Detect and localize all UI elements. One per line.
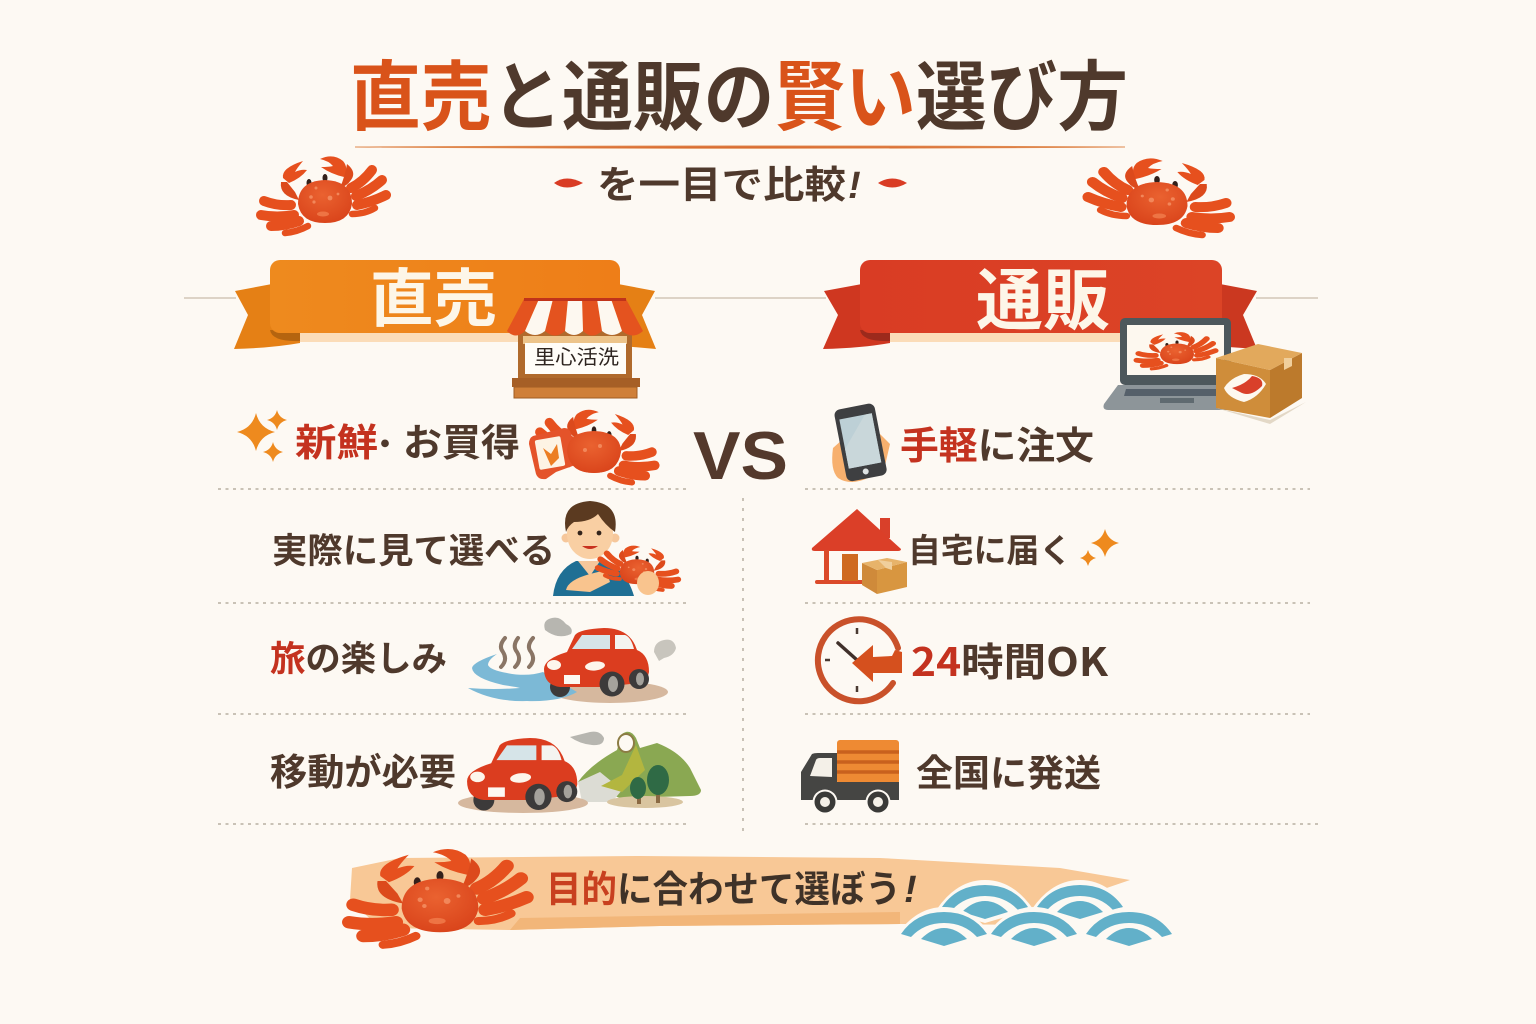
- icon: person with crab: [553, 501, 678, 596]
- icon: crab and card: [529, 410, 655, 482]
- icon: shop: 里心活洗: [534, 341, 619, 370]
- banner: 通販: [823, 247, 1257, 349]
- row: 全国に発送: 全国に発送: [916, 743, 1101, 797]
- row: 全国に発送: [801, 740, 1101, 814]
- row: 自宅に届く: 自宅に届く: [908, 524, 1072, 572]
- row: 24時間OK: 24時間OK: [911, 632, 1108, 688]
- row: 手軽に注文: 手軽に注文: [900, 415, 1094, 470]
- banner: 直売: 直売: [370, 249, 497, 340]
- row: 実際に見て選べる: 実際に見て選べる: [272, 523, 555, 574]
- row: 新鮮・お買得: [237, 410, 520, 467]
- row: 24時間OK: [818, 619, 1108, 701]
- row: 手軽に注文: [832, 403, 1094, 482]
- title: 直売と通販の賢い選び方: [350, 36, 1128, 146]
- icon: clock with arrow: [818, 619, 902, 701]
- crab: top left: [261, 156, 386, 233]
- row: 旅の楽しみ: 旅の楽しみ: [270, 631, 447, 682]
- waves: [896, 880, 1177, 950]
- center dotted divider: [742, 498, 744, 836]
- icon: truck: [801, 740, 899, 814]
- icon: house and box: [812, 509, 907, 594]
- subtitle: !: [848, 165, 861, 207]
- row: 新鮮・お買得: お買得: [403, 412, 520, 467]
- title underline: [355, 146, 1125, 148]
- icon: shop: [507, 298, 643, 398]
- row: 新鮮・お買得: ・: [370, 420, 400, 464]
- brush stroke: [350, 856, 1130, 930]
- row: 自宅に届く: [812, 509, 1119, 594]
- icon: sparkles: [237, 410, 287, 462]
- right dividers: [805, 489, 1318, 824]
- VS: VS: [693, 418, 788, 494]
- subtitle: を一目で比較: [597, 154, 846, 209]
- banner: 通販: 通販: [976, 247, 1110, 344]
- icon: phone in hand: [832, 403, 890, 482]
- icon: car and hot spring: [468, 618, 676, 703]
- bottom banner: [349, 849, 1177, 950]
- icon: sparkles: [1080, 529, 1119, 566]
- subtitle: [554, 154, 907, 209]
- row: 新鮮・お買得: 新鮮: [295, 412, 378, 467]
- crab: bottom: [349, 849, 527, 945]
- divider: [218, 489, 686, 824]
- header rules: [184, 297, 1318, 299]
- row: 移動が必要: 移動が必要: [270, 742, 456, 796]
- bottom banner: !: [904, 869, 917, 911]
- banner: 直売: [234, 249, 656, 349]
- crab: top right: [1088, 158, 1229, 235]
- icon: laptop and box: [1104, 318, 1306, 424]
- bottom banner: 目的に合わせて選ぼう: [546, 859, 901, 913]
- icon: car and mountains: [458, 732, 701, 813]
